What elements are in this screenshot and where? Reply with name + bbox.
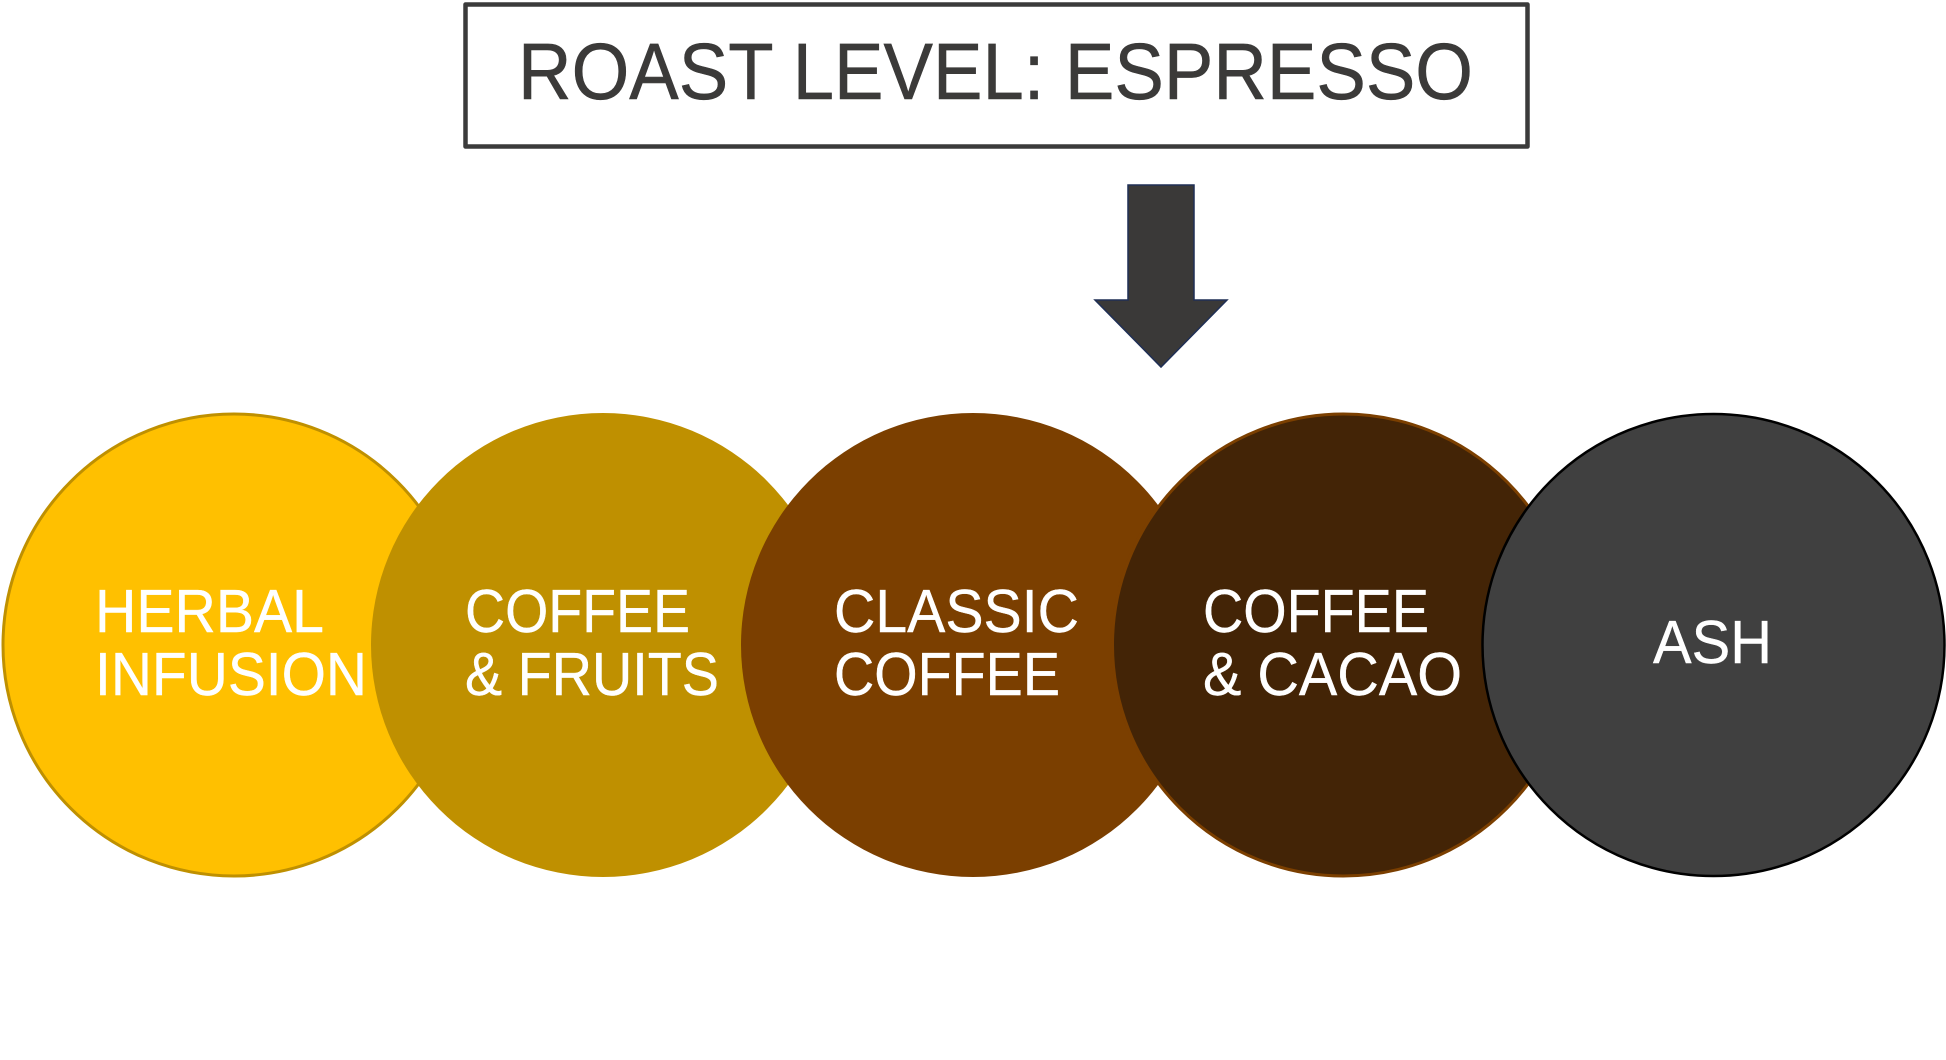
label: coffee and fruits: & FRUITS: [465, 640, 719, 708]
arrow: pointing down to classic coffee and cacao overlap: [1095, 185, 1227, 367]
circle: coffee and cacao: [1112, 414, 1574, 876]
label: coffee and fruits: COFFEE: [465, 577, 690, 645]
label: ash: ASH: [1653, 608, 1772, 676]
label: classic coffee: CLASSIC: [834, 577, 1079, 645]
title text: ROAST LEVEL: ESPRESSO: [518, 27, 1473, 116]
circle: herbal infusion: [3, 414, 465, 876]
title box: roast level: [466, 4, 1528, 146]
label: coffee and cacao: & CACAO: [1203, 640, 1462, 708]
label: herbal infusion: HERBAL: [95, 577, 324, 645]
circle: ash: [1482, 414, 1944, 876]
label: coffee and cacao: COFFEE: [1203, 577, 1429, 645]
circle: classic coffee: [741, 413, 1205, 877]
label: classic coffee: COFFEE: [834, 640, 1060, 708]
circle: coffee and fruits: [371, 413, 835, 877]
label: herbal infusion: INFUSION: [95, 640, 367, 708]
